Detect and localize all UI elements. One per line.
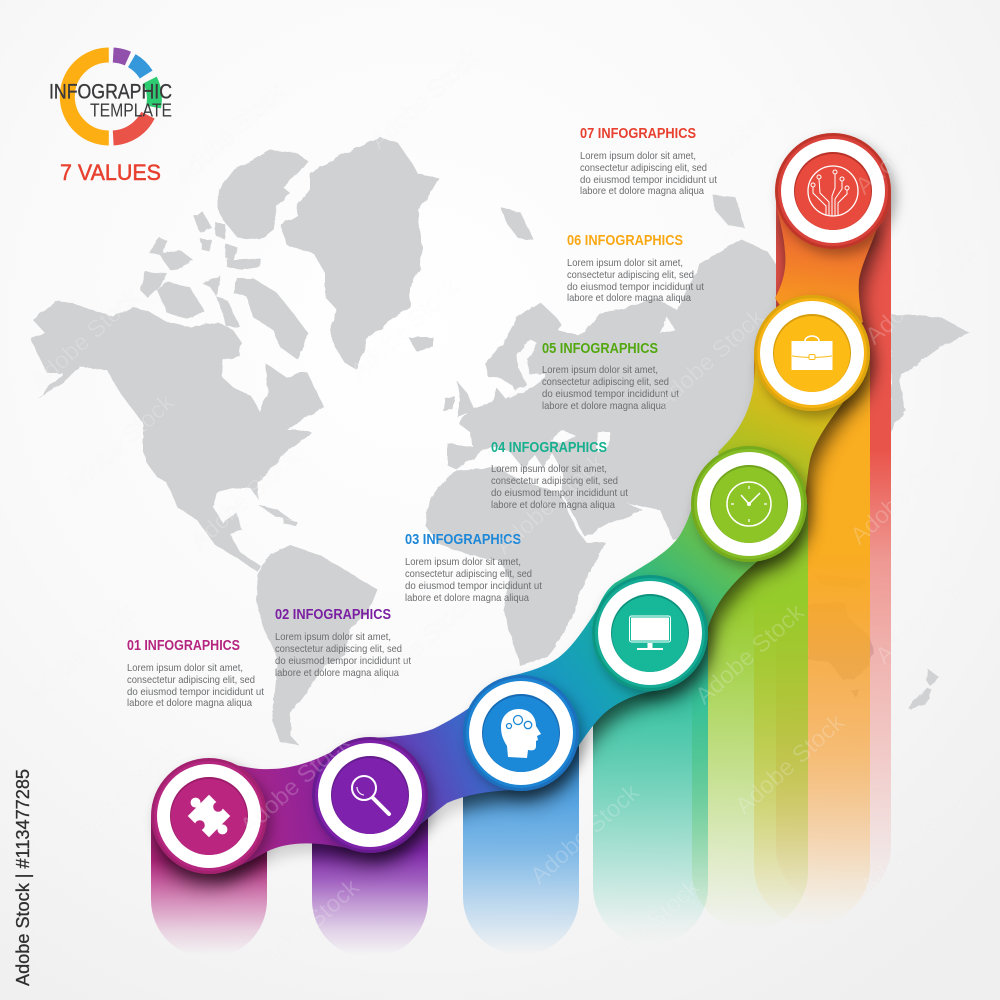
watermark: Adobe Stock — [700, 63, 820, 175]
icon: puzzle piece — [179, 786, 239, 846]
step circle 6: briefcase — [754, 295, 870, 411]
text block 06: Lorem ipsum dolor sit amet, — [567, 257, 683, 269]
text block 01 — [127, 638, 264, 709]
column 2 purple — [312, 795, 428, 958]
text block 03: consectetur adipiscing elit, sed — [405, 568, 532, 580]
logo title: INFOGRAPHIC — [49, 80, 172, 104]
logo donut — [67, 55, 154, 138]
text block 06: 06 INFOGRAPHICS — [567, 233, 683, 249]
text block 04: consectetur adipiscing elit, sed — [491, 475, 618, 487]
watermark: Adobe Stock — [360, 588, 480, 700]
icon: clock — [727, 482, 771, 526]
step circle 5: clock — [691, 446, 807, 562]
watermark: Adobe Stock — [855, 788, 975, 900]
inland seas — [507, 317, 675, 452]
text block 03: do eiusmod tempor incididunt ut — [405, 580, 542, 592]
text block 05 — [542, 341, 679, 412]
watermark: Adobe Stock — [25, 283, 145, 395]
text block 02: Lorem ipsum dolor sit amet, — [275, 631, 391, 643]
watermark: Adobe Stock — [65, 738, 185, 850]
text block 07: consectetur adipiscing elit, sed — [580, 162, 707, 174]
text block 04 — [491, 440, 628, 511]
text block 05: labore et dolore magna aliqua — [542, 400, 666, 412]
world map — [30, 137, 970, 745]
text block 01: Lorem ipsum dolor sit amet, — [127, 662, 243, 674]
text block 05: do eiusmod tempor incididunt ut — [542, 388, 679, 400]
columns — [151, 191, 891, 958]
step circle 3: head with gears — [463, 675, 579, 791]
text block 03: labore et dolore magna aliqua — [405, 592, 529, 604]
watermark: Adobe Stock — [170, 78, 290, 190]
watermark: Adobe Stock — [20, 598, 140, 710]
icon: magnifier — [352, 776, 389, 814]
text block 07: 07 INFOGRAPHICS — [580, 126, 696, 142]
ribbon shadow on columns — [153, 202, 881, 886]
watermark: Adobe Stock — [365, 43, 485, 155]
icon: head — [501, 709, 541, 758]
watermark: Adobe Stock — [650, 303, 770, 415]
text block 07: labore et dolore magna aliqua — [580, 185, 704, 197]
text block 01: consectetur adipiscing elit, sed — [127, 674, 255, 686]
column 4 teal — [593, 633, 708, 945]
watermark: Adobe Stock — [60, 388, 180, 500]
column 6 orange — [754, 353, 870, 925]
watermark: Adobe Stock — [585, 873, 705, 985]
step circle 7: circuit tree — [775, 133, 891, 249]
watermark: Adobe Stock — [345, 273, 465, 385]
text block 07: do eiusmod tempor incididunt ut — [580, 174, 717, 186]
watermark: Adobe Stock — [490, 448, 610, 560]
logo: donut with template title — [49, 55, 172, 138]
text block 07 — [580, 126, 717, 197]
text block 01: do eiusmod tempor incididunt ut — [127, 686, 264, 698]
text block 06 — [567, 233, 704, 304]
watermark: Adobe Stock — [235, 728, 355, 840]
watermark: Adobe Stock — [525, 778, 645, 890]
text block 02: 02 INFOGRAPHICS — [275, 607, 391, 623]
subtitle: 7 values: 7 VALUES — [60, 160, 161, 185]
text block 02: consectetur adipiscing elit, sed — [275, 643, 402, 655]
icon: briefcase — [792, 336, 832, 370]
stock id side label: Adobe Stock | #113477285 — [12, 769, 33, 986]
text block 01: labore et dolore magna aliqua — [127, 697, 252, 709]
watermark: Adobe Stock — [245, 873, 365, 985]
column 3 blue — [463, 733, 579, 955]
logo subtitle: TEMPLATE — [90, 100, 172, 120]
text block 04: do eiusmod tempor incididunt ut — [491, 487, 628, 499]
watermark: Adobe Stock — [730, 708, 850, 820]
watermark: Adobe Stock — [870, 558, 990, 670]
watermark: Adobe Stock — [185, 443, 305, 555]
text block 06: labore et dolore magna aliqua — [567, 292, 691, 304]
step circle 4: monitor — [592, 575, 708, 691]
text block 04: 04 INFOGRAPHICS — [491, 440, 607, 456]
text block 02: do eiusmod tempor incididunt ut — [275, 655, 411, 667]
ribbon shadow on background — [218, 200, 881, 883]
text block 04: labore et dolore magna aliqua — [491, 499, 615, 511]
text block 06: consectetur adipiscing elit, sed — [567, 269, 694, 281]
text block 05: 05 INFOGRAPHICS — [542, 341, 658, 357]
step circle 2: magnifier — [312, 737, 428, 853]
text block 07: Lorem ipsum dolor sit amet, — [580, 150, 696, 162]
watermark: Adobe Stock — [845, 438, 965, 550]
column 7 red — [776, 191, 891, 905]
text block 06: do eiusmod tempor incididunt ut — [567, 281, 704, 293]
text block 05: Lorem ipsum dolor sit amet, — [542, 364, 658, 376]
watermark: Adobe Stock — [690, 598, 810, 710]
watermark: Adobe Stock — [850, 88, 970, 200]
column 1 magenta — [151, 816, 267, 958]
text block 05: consectetur adipiscing elit, sed — [542, 376, 669, 388]
text block 03: Lorem ipsum dolor sit amet, — [405, 556, 521, 568]
column 5 green — [692, 504, 808, 930]
ribbon connecting the circles — [215, 191, 878, 874]
text block 02: labore et dolore magna aliqua — [275, 667, 399, 679]
text block 01: 01 INFOGRAPHICS — [127, 638, 240, 654]
text block 02 — [275, 607, 411, 679]
text block 04: Lorem ipsum dolor sit amet, — [491, 463, 607, 475]
watermark: Adobe Stock — [860, 238, 980, 350]
text block 03: 03 INFOGRAPHICS — [405, 532, 521, 548]
icon: circuit tree — [808, 166, 858, 216]
step circle 1: puzzle — [151, 758, 267, 874]
text block 03 — [405, 532, 542, 604]
icon: monitor — [630, 616, 670, 650]
